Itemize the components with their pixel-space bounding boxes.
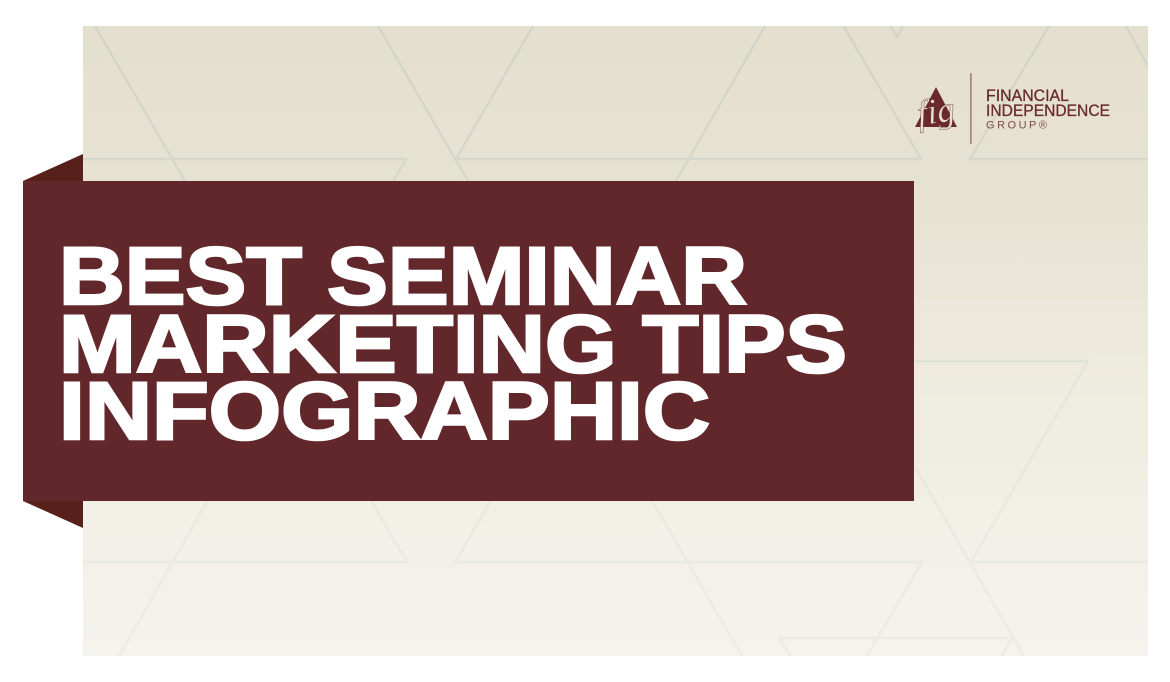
title — [59, 231, 847, 457]
logo wordmark — [986, 87, 1110, 132]
logo wordmark: FINANCIAL — [986, 87, 1069, 105]
title: MARKETING TIPS — [59, 299, 847, 390]
ribbon fold: bottom — [23, 501, 83, 528]
logo wordmark: INDEPENDENCE — [986, 102, 1110, 120]
logo wordmark: GROUP® — [986, 120, 1047, 132]
title: BEST SEMINAR — [59, 231, 747, 322]
title banner — [23, 181, 914, 501]
icon: fig triangle: fig — [914, 89, 957, 133]
title: INFOGRAPHIC — [59, 366, 710, 457]
ribbon fold: top — [23, 154, 83, 181]
logo — [914, 73, 1110, 144]
logo divider — [970, 73, 972, 144]
